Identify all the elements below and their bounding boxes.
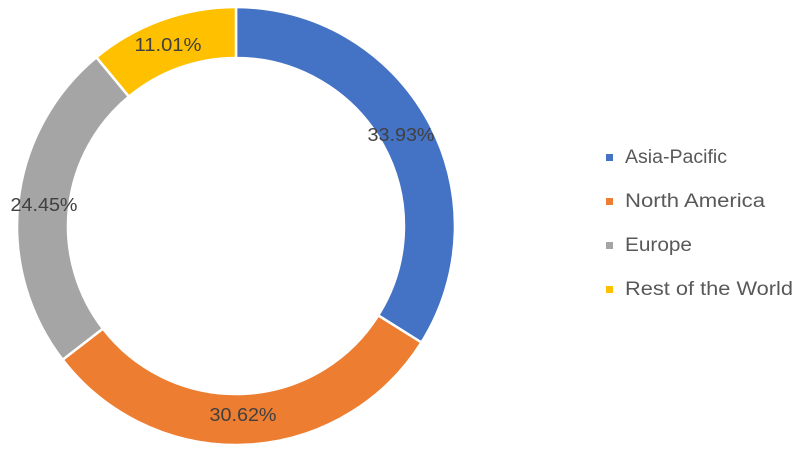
legend item: Rest of the World: Rest of the World — [625, 279, 793, 300]
segment: North America — [63, 315, 421, 445]
legend item: North America: North America — [625, 191, 766, 212]
data labels — [10, 35, 434, 425]
label: 30.62%: 30.62% — [210, 405, 276, 425]
label: 11.01%: 11.01% — [134, 35, 202, 55]
legend — [606, 147, 793, 300]
segment: Asia-Pacific — [236, 7, 455, 342]
legend item: Europe: Europe — [625, 235, 692, 256]
label: 33.93%: 33.93% — [368, 125, 434, 145]
segment: Rest of the World — [96, 7, 236, 97]
label: 24.45%: 24.45% — [10, 195, 78, 215]
segment: Europe — [17, 57, 129, 360]
legend item: Asia-Pacific: Asia-Pacific — [625, 147, 727, 168]
donut chart — [17, 7, 455, 445]
